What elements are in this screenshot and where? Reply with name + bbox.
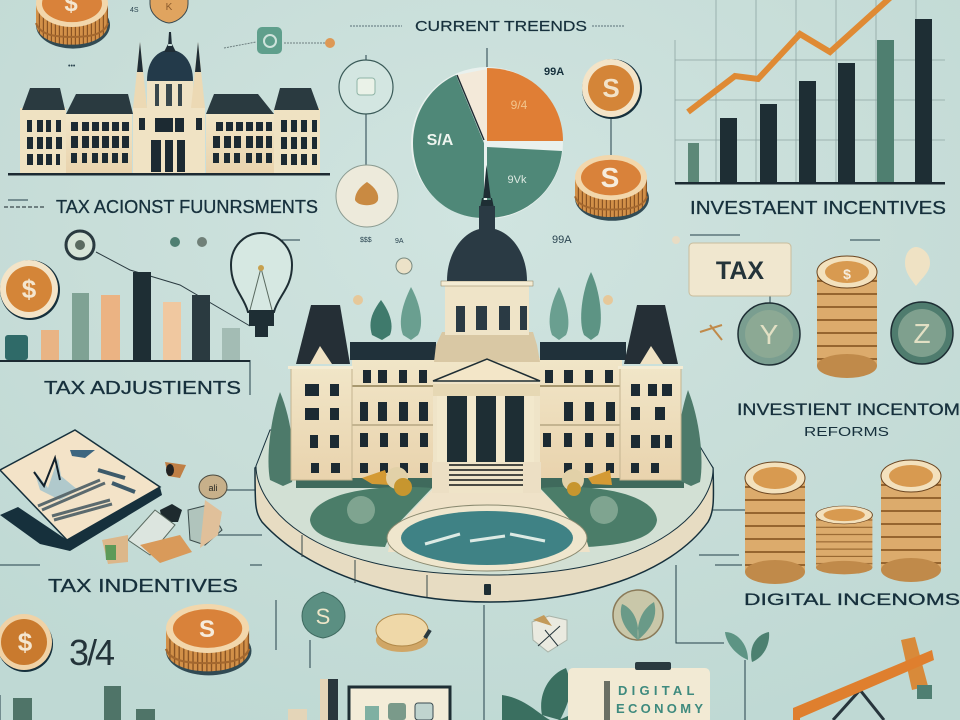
coin stack: tall	[817, 256, 877, 378]
medal green	[302, 592, 345, 638]
pie chart: 9/4	[511, 98, 528, 112]
icon: lightbulb	[231, 233, 292, 337]
pond	[387, 505, 587, 571]
pie chart	[411, 66, 572, 246]
platform	[255, 420, 713, 602]
pump jack	[793, 637, 934, 720]
clipboard: digital economy: ECONOMY	[616, 701, 704, 716]
coin bottom left	[0, 614, 53, 672]
coin stack: S	[601, 162, 619, 193]
medal: glass	[339, 60, 393, 114]
medal: leaf	[613, 590, 663, 640]
bar chart: left	[0, 272, 250, 362]
coin flat: S	[602, 73, 620, 103]
coin stacks row	[745, 460, 941, 584]
section heading: current trends: CURRENT TREENDS	[415, 18, 587, 35]
heading: digital incenoms: DIGITAL INCENOMS	[744, 590, 960, 609]
medal: right: Z	[913, 318, 931, 349]
small annotations: •••	[68, 63, 76, 70]
tower right	[618, 305, 683, 480]
clipboard: digital economy	[502, 662, 710, 720]
clipboard: digital economy: DIGITAL	[618, 683, 696, 698]
coin stack: tall: $	[843, 266, 851, 282]
bar chart: top right	[675, 0, 945, 184]
fraction 3/4: 3/4	[69, 632, 114, 673]
coin stack bottom: S	[199, 616, 215, 643]
small coin snail	[376, 614, 430, 652]
coin stack	[575, 155, 649, 221]
tag icon	[224, 27, 335, 54]
bars bottom left	[13, 686, 155, 720]
trend arrow	[688, 0, 892, 112]
pie chart: 99A	[552, 234, 572, 246]
label: tax card	[689, 243, 791, 296]
coin stack bottom	[166, 604, 251, 675]
icon: leaf pair	[725, 632, 769, 662]
medal: left: Y	[760, 319, 779, 350]
small annotations: 9A	[395, 238, 404, 245]
portico	[432, 359, 541, 493]
heading: tax acionst fuunrsments: TAX ACIONST FUUNRSMENTS	[56, 197, 318, 217]
coin flat	[582, 59, 642, 119]
small medal top: K	[166, 2, 173, 13]
bars and tablet	[288, 679, 450, 720]
trees behind building	[370, 272, 601, 340]
subheading: reforms: REFORMS	[804, 424, 889, 439]
coin stack top left	[36, 0, 110, 49]
bulb small	[905, 247, 930, 286]
heading: investient incentom: INVESTIENT INCENTOM	[737, 400, 960, 419]
medal: cream	[336, 165, 398, 227]
coin bottom left: $	[18, 627, 33, 657]
pie chart: 9Vk	[508, 174, 527, 186]
small medal top	[150, 0, 188, 23]
heading: investaent incentives: INVESTAENT INCENTIVES	[690, 198, 946, 218]
left and right wings	[350, 342, 626, 478]
document: tax chart sheet	[0, 430, 162, 551]
building: parliament	[8, 32, 330, 176]
pie chart: S/A	[427, 132, 454, 149]
coin left	[0, 260, 60, 320]
windows	[305, 370, 672, 473]
medal green: S	[316, 604, 330, 629]
flowers	[362, 467, 612, 496]
small annotations: $$$	[360, 237, 372, 244]
coin left: $	[22, 274, 37, 304]
small annotations: 4S	[130, 7, 139, 14]
small annotations	[68, 7, 722, 340]
heading: tax indentives: TAX INDENTIVES	[48, 576, 238, 596]
pile of tax items	[102, 462, 227, 564]
main building on platform	[255, 165, 713, 602]
medal: right	[891, 302, 953, 364]
medal: left	[738, 303, 800, 365]
drum and dome	[434, 165, 540, 362]
tower left	[288, 305, 353, 480]
icon: eye	[66, 231, 250, 326]
label: tax card: TAX	[716, 257, 764, 285]
pie chart: 99A	[544, 66, 564, 78]
pile of tax items: ali	[208, 483, 218, 493]
small pie medal	[532, 615, 567, 652]
side trees	[268, 390, 702, 486]
heading: tax adjustients: TAX ADJUSTIENTS	[44, 378, 241, 398]
